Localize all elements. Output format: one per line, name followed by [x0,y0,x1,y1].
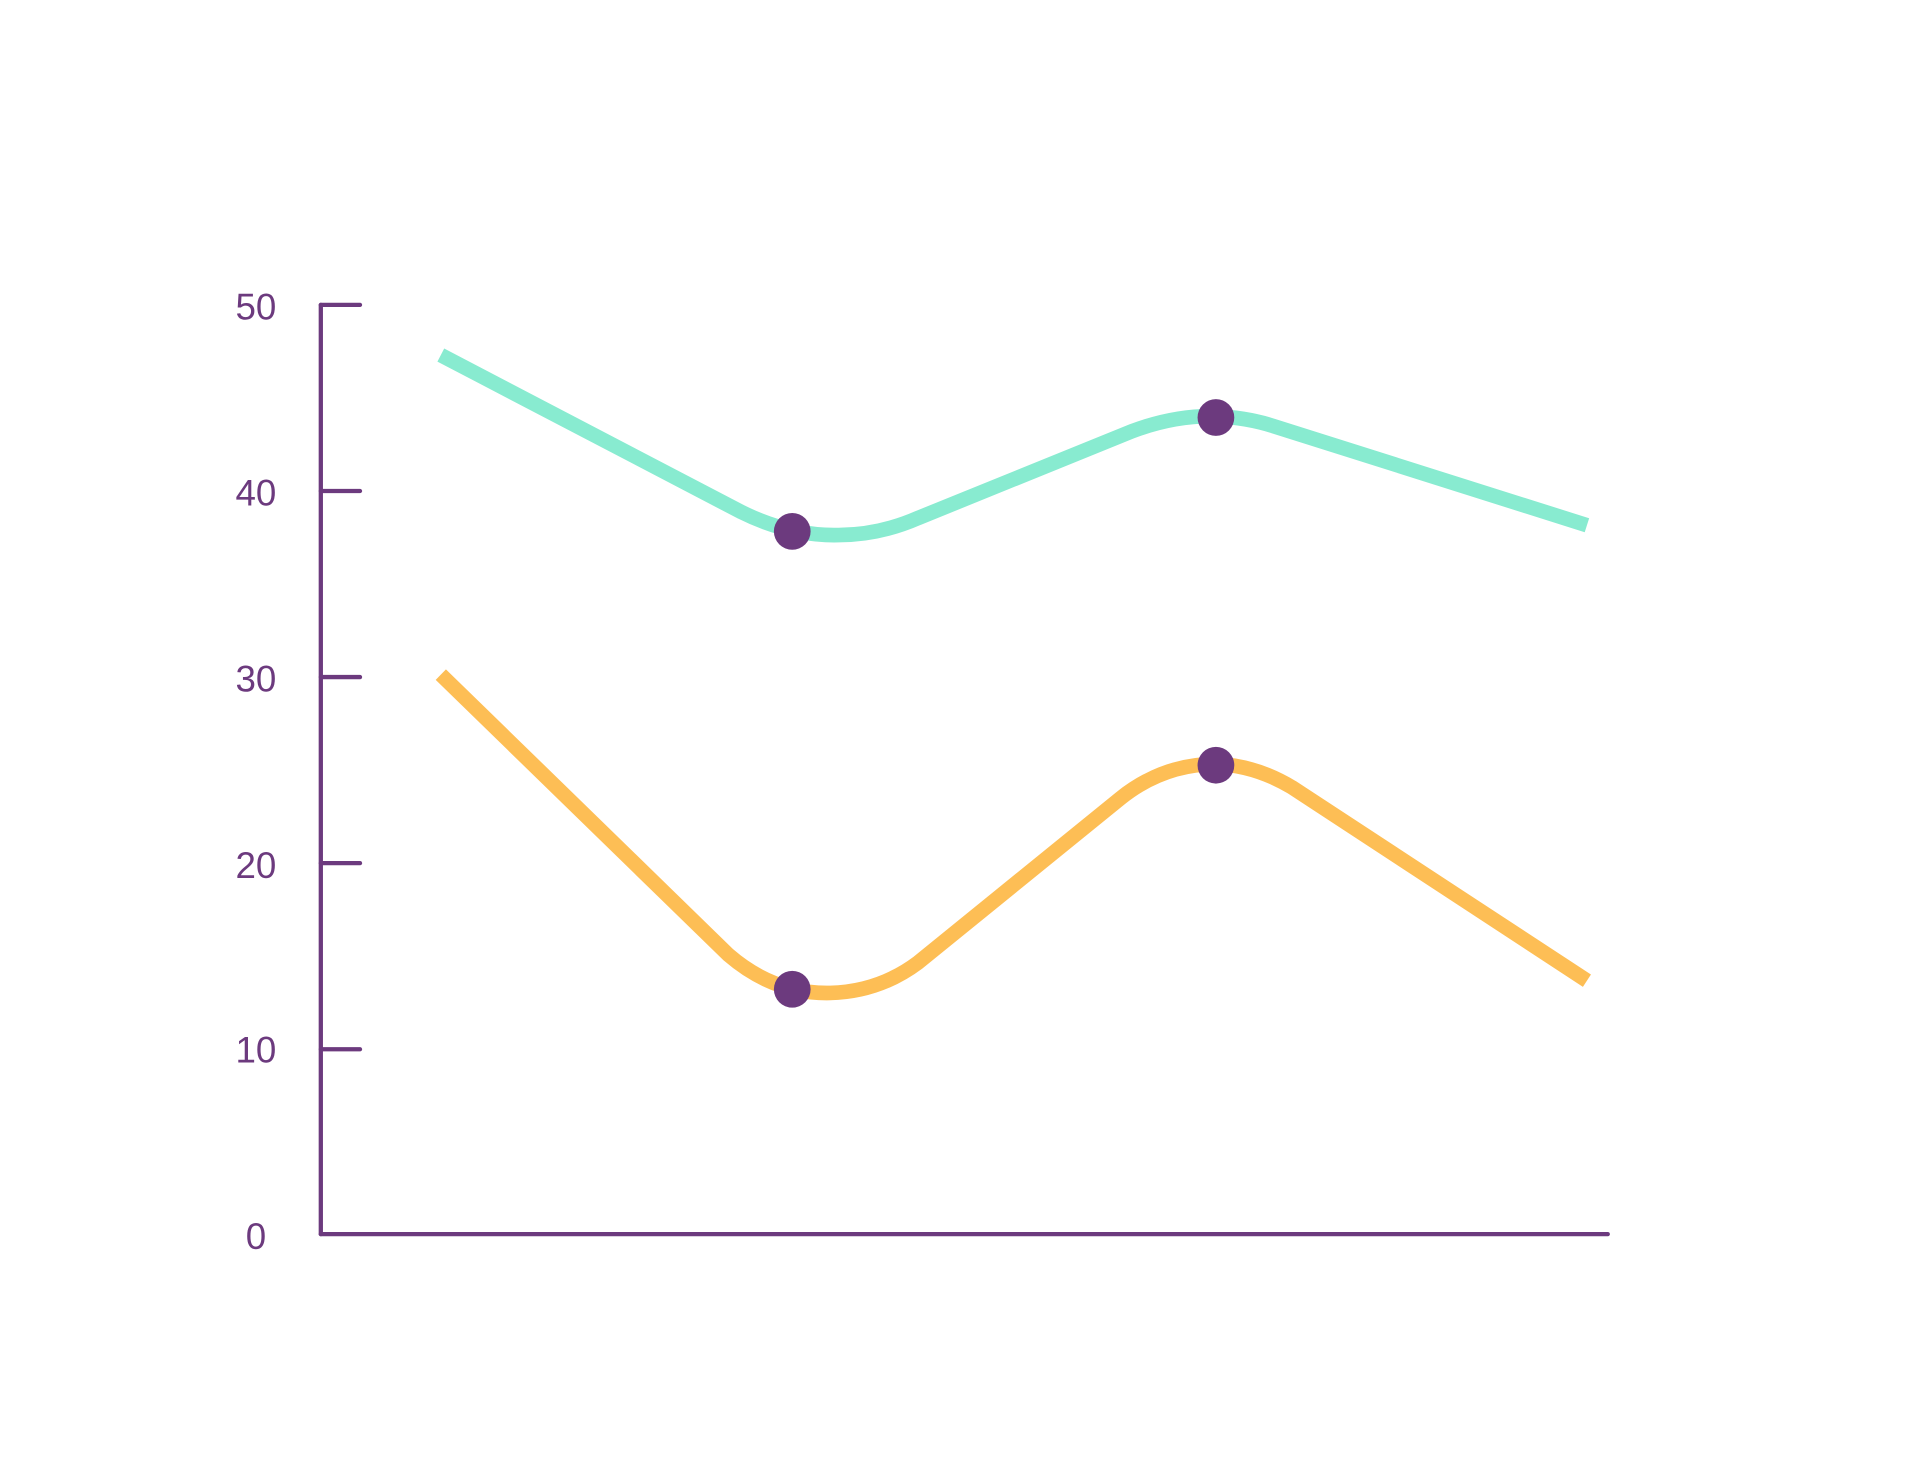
series: teal line [441,355,1587,550]
series: orange line [441,675,1587,1008]
y axis labels: 10 [235,1030,276,1071]
y axis labels: 30 [235,659,276,700]
y axis labels: 50 [235,287,276,328]
y axis with ticks [321,305,1608,1234]
y axis labels: 0 [246,1216,266,1257]
y axis labels: 40 [235,473,276,514]
y axis labels [235,287,276,1257]
y axis labels: 20 [235,845,276,886]
